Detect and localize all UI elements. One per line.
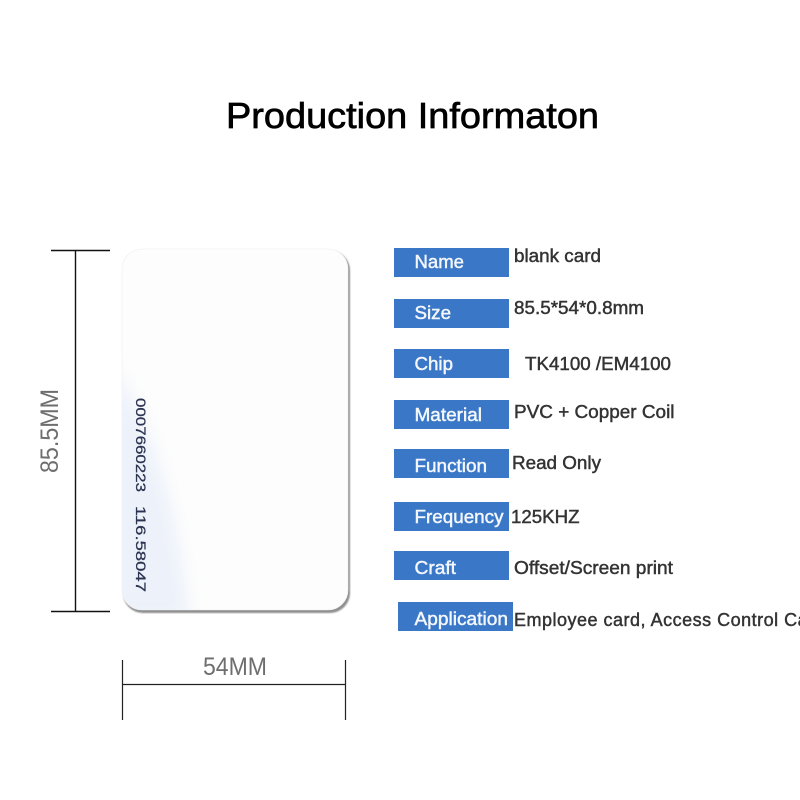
row: craft (394, 551, 673, 580)
row: name: blank card (514, 246, 601, 266)
row: material: PVC + Copper Coil (514, 402, 674, 422)
spec table (394, 246, 800, 631)
height label: 85.5MM (36, 389, 64, 473)
title: Production Informaton (226, 95, 599, 136)
row: frequency (394, 502, 580, 531)
row: material (394, 400, 674, 429)
row: function (394, 449, 601, 478)
width dimension lines (122, 660, 346, 720)
card sheen (122, 385, 188, 610)
card illustration (112, 249, 350, 620)
row: application (398, 602, 800, 631)
card shadow (123, 250, 350, 613)
width dimension (122, 653, 346, 720)
row: application: Application (414, 609, 508, 629)
row: chip: Chip (414, 354, 453, 374)
row: frequency: 125KHZ (511, 507, 580, 527)
card serial number: 0007660223 (133, 398, 148, 492)
row: frequency: Frequency (414, 507, 504, 527)
height dimension (36, 250, 110, 612)
card serial number: 116.58047 (133, 506, 148, 592)
row: size: Size (414, 303, 451, 323)
row: chip (394, 349, 671, 378)
row: craft: Craft (414, 558, 456, 578)
row: craft: Offset/Screen print (514, 558, 673, 578)
card face (122, 249, 348, 610)
width label: 54MM (203, 653, 267, 681)
row: material: Material (414, 405, 482, 425)
row: chip: TK4100 /EM4100 (525, 354, 671, 374)
row: size: 85.5*54*0.8mm (514, 298, 644, 318)
row: function: Read Only (512, 453, 601, 473)
row: function: Function (414, 456, 487, 476)
height dimension lines (51, 250, 110, 612)
row: name: Name (414, 252, 464, 272)
row: name (394, 246, 601, 277)
row: size (394, 298, 644, 328)
card serial number (133, 398, 148, 592)
